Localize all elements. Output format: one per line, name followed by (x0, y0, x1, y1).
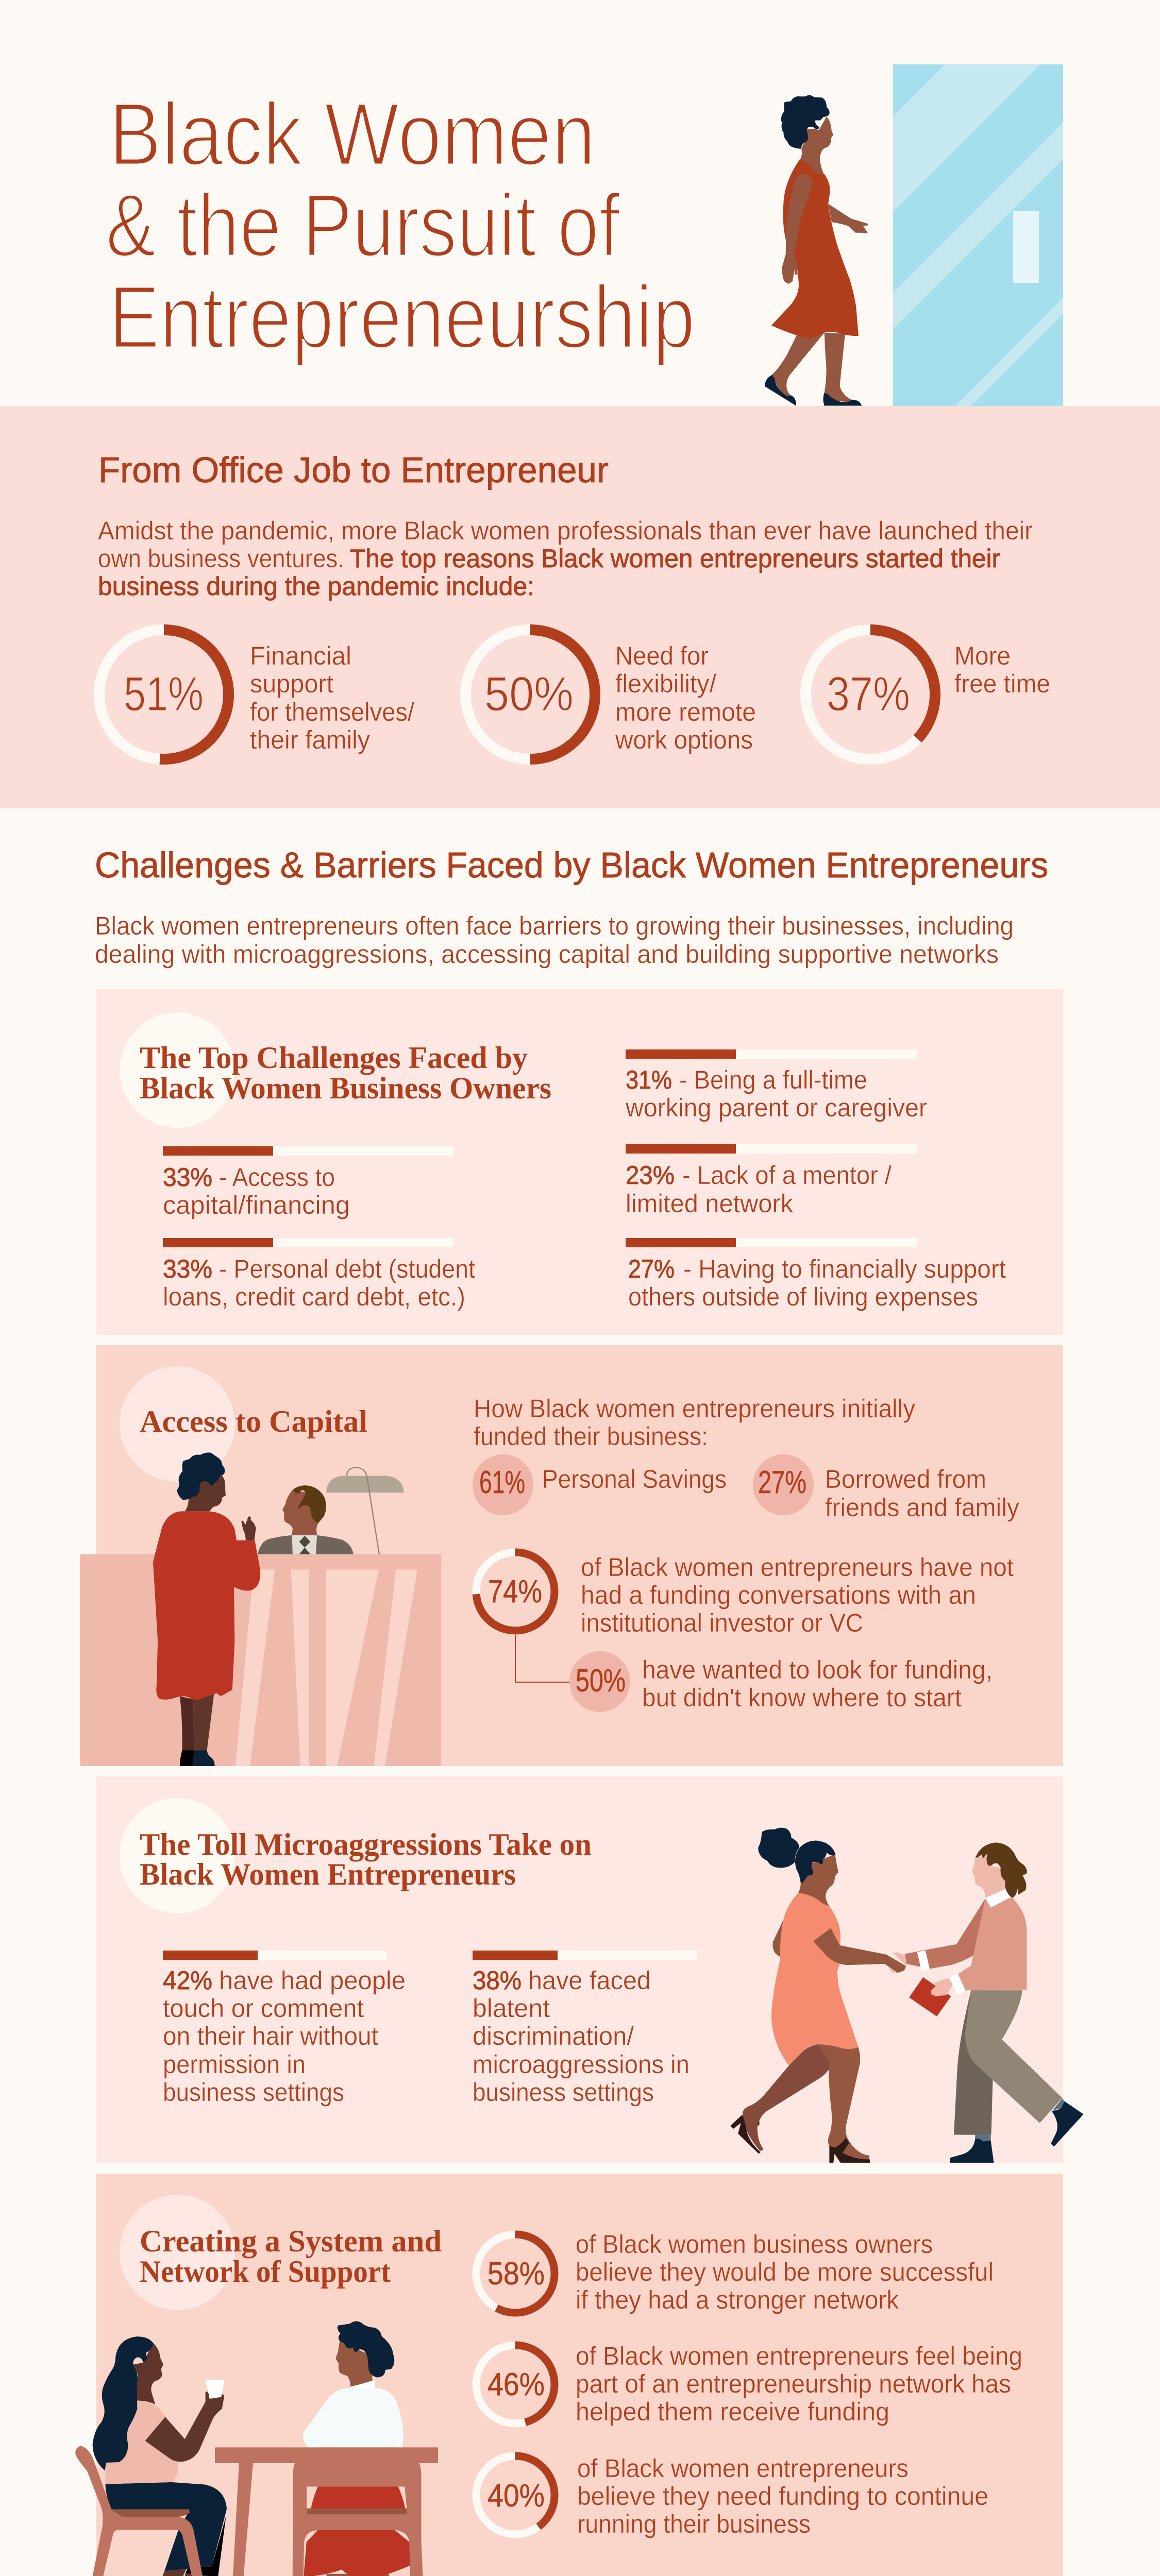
stat ring: 46% (476, 2342, 1022, 2426)
stat ring: 58% (476, 2230, 994, 2314)
stat ring: 58%: of Black women business owners (576, 2230, 933, 2259)
title: Black Women (109, 84, 596, 184)
bar stat: 33% access to capital: 33% (163, 1163, 212, 1192)
heading: Black Women Entrepreneurs (140, 1857, 516, 1891)
title (106, 84, 695, 367)
intro text: The top reasons Black women entrepreneurs started their (350, 544, 1000, 573)
bar stat: 42% hair: 42% (163, 1966, 212, 1995)
bar stat: 27% financially support others: - Having to financially support (683, 1255, 1006, 1283)
bar stat: 33% access to capital (163, 1146, 453, 1219)
bar stat: 38% discrimination: microaggressions in (473, 2050, 690, 2079)
stat label: flexibility: flexibility/ (615, 669, 716, 698)
stat ring: 74% (476, 1552, 1014, 1637)
bar stat: 31% full-time parent: working parent or caregiver (625, 1093, 927, 1122)
stat ring: 37% (806, 630, 935, 759)
stat ring: 50% (466, 630, 595, 759)
stat: 27% friends and family: Borrowed from (825, 1465, 986, 1494)
stat: 27% friends and family: friends and family (825, 1493, 1019, 1522)
bar stat: 27% financially support others (626, 1238, 1006, 1311)
panel: access to capital (80, 1345, 1063, 1766)
bar stat: 31% full-time parent: - Being a full-time (679, 1065, 867, 1094)
section intro text (95, 911, 1014, 969)
stat ring: 58%: 58% (487, 2256, 545, 2292)
stat ring: 40%: running their business (577, 2510, 811, 2538)
bar stat: 42% hair: touch or comment (163, 1994, 364, 2023)
bar stat: 42% hair: on their hair without (163, 2022, 378, 2050)
stat label: flexibility: work options (615, 725, 753, 754)
stat: 61% personal savings: Personal Savings (542, 1465, 727, 1494)
stat: 50% wanted to look for funding: have wanted to look for funding, (642, 1655, 993, 1684)
bar stat: 27% financially support others: 27% (628, 1255, 675, 1283)
heading: Black Women Business Owners (140, 1071, 551, 1105)
heading (140, 1827, 592, 1891)
stat ring: 50%: 50% (484, 667, 574, 721)
stat ring: 46%: of Black women entrepreneurs feel being (576, 2342, 1022, 2370)
bar stat: 33% access to capital: capital/financing (163, 1191, 350, 1219)
stat ring: 37%: 37% (827, 667, 910, 721)
heading: The Toll Microaggressions Take on (140, 1827, 592, 1861)
stat label: financial support: for themselves/ (250, 698, 414, 726)
funding intro text: funded their business: (474, 1422, 708, 1451)
bar stat: 38% discrimination (473, 1951, 697, 2107)
bar stat: 42% hair: have had people (219, 1966, 406, 1995)
illustration: handshake (730, 1828, 1084, 2163)
heading: From Office Job to Entrepreneur (98, 450, 609, 490)
stat ring: 58%: if they had a stronger network (576, 2285, 899, 2314)
stat label: more free time: More (954, 641, 1011, 670)
heading: Network of Support (140, 2255, 391, 2289)
bar stat: 33% personal debt (163, 1238, 475, 1311)
stat label: flexibility: more remote (615, 698, 756, 726)
stat ring: 51% (99, 630, 229, 759)
stat ring: 40% (476, 2454, 988, 2538)
stat label: financial support (250, 641, 414, 754)
heading: Access to Capital (140, 1404, 367, 1438)
bar stat: 42% hair: business settings (163, 2078, 344, 2107)
stat label: flexibility: Need for (615, 641, 709, 670)
illustration: banker, desk, lamp and standing woman (80, 1452, 441, 1766)
stat label: financial support: support (250, 669, 333, 698)
stat ring: 58%: believe they would be more successful (576, 2258, 994, 2286)
panel: toll of microaggressions (96, 1776, 1084, 2163)
panel: top challenges (96, 989, 1063, 1335)
bar stat: 33% personal debt: loans, credit card debt, etc.) (163, 1282, 465, 1311)
stat ring: 46%: helped them receive funding (576, 2397, 889, 2426)
stat: 61% personal savings (473, 1454, 727, 1515)
title: & the Pursuit of (106, 175, 620, 275)
stat ring: 74%: of Black women entrepreneurs have not (581, 1553, 1014, 1582)
bar stat: 38% discrimination: discrimination/ (473, 2022, 634, 2050)
intro text (98, 516, 1033, 601)
stat ring: 40%: 40% (487, 2478, 545, 2514)
stat ring: 40%: of Black women entrepreneurs (577, 2454, 909, 2483)
stat label: financial support: Financial (250, 641, 351, 670)
connector line (515, 1635, 569, 1682)
stat ring: 40%: believe they need funding to continue (577, 2482, 988, 2511)
stat: 50% wanted to look for funding (569, 1651, 993, 1712)
intro text: business during the pandemic include: (98, 572, 534, 601)
panel: from office job to entrepreneur (0, 406, 1160, 808)
bar stat: 33% personal debt: - Personal debt (student (219, 1255, 475, 1283)
stat ring: 46%: part of an entrepreneurship network has (576, 2369, 1011, 2398)
title: Entrepreneurship (109, 267, 695, 367)
intro text: own business ventures. (98, 544, 344, 573)
stat label: more free time (954, 641, 1050, 698)
illustration: woman walking to door (765, 95, 868, 405)
bar stat: 31% full-time parent: 31% (626, 1065, 672, 1094)
stat: 50% wanted to look for funding: 50% (576, 1663, 626, 1699)
panel: system and network of support (75, 2174, 1063, 2576)
stat ring: 46%: 46% (487, 2367, 545, 2402)
bar stat: 23% lack of mentor: limited network (626, 1189, 794, 1218)
bar stat: 31% full-time parent (625, 1049, 927, 1122)
stat: 50% wanted to look for funding: but didn't know where to start (642, 1683, 962, 1712)
stat label: more free time: free time (954, 669, 1050, 698)
heading (140, 2224, 442, 2289)
heading: Creating a System and (140, 2224, 442, 2258)
bar stat: 42% hair (163, 1951, 406, 2107)
stat ring: 74%: had a funding conversations with an (581, 1581, 976, 1609)
stat ring: 51%: 51% (124, 667, 204, 721)
heading (140, 1041, 551, 1105)
bar stat: 33% access to capital: - Access to (219, 1163, 335, 1192)
stat: 27% friends and family: 27% (758, 1465, 806, 1500)
bar stat: 23% lack of mentor: 23% (626, 1161, 675, 1190)
illustration: two women at a cafe table (75, 2321, 438, 2576)
stat ring: 74%: institutional investor or VC (581, 1608, 863, 1637)
bar stat: 23% lack of mentor: - Lack of a mentor / (682, 1161, 892, 1190)
funding intro text: How Black women entrepreneurs initially (474, 1394, 915, 1423)
bar stat: 38% discrimination: blatent (473, 1994, 550, 2023)
section heading: challenges and barriers: Challenges & Barriers Faced by Black Women Entrepreneurs (95, 845, 1048, 885)
bar stat: 23% lack of mentor (626, 1144, 917, 1218)
bar stat: 38% discrimination: have faced (528, 1966, 651, 1995)
bar stat: 33% personal debt: 33% (163, 1255, 212, 1283)
stat label: flexibility (615, 641, 756, 754)
funding intro text (474, 1394, 915, 1451)
stat: 27% friends and family (753, 1454, 1019, 1522)
bar stat: 42% hair: permission in (163, 2050, 306, 2079)
illustration: glass door (893, 64, 1063, 406)
section intro text: Black women entrepreneurs often face barriers to growing their businesses, including (95, 911, 1014, 940)
stat: 61% personal savings: 61% (479, 1465, 525, 1500)
stat label: financial support: their family (250, 725, 370, 754)
bar stat: 38% discrimination: 38% (473, 1966, 522, 1995)
stat ring: 74%: 74% (488, 1574, 542, 1609)
bar stat: 38% discrimination: business settings (473, 2078, 654, 2107)
section intro text: dealing with microaggressions, accessing capital and building supportive networks (95, 940, 999, 969)
heading: The Top Challenges Faced by (140, 1041, 528, 1075)
bar stat: 27% financially support others: others outside of living expenses (628, 1282, 978, 1311)
intro text: Amidst the pandemic, more Black women professionals than ever have launched their (98, 516, 1033, 545)
